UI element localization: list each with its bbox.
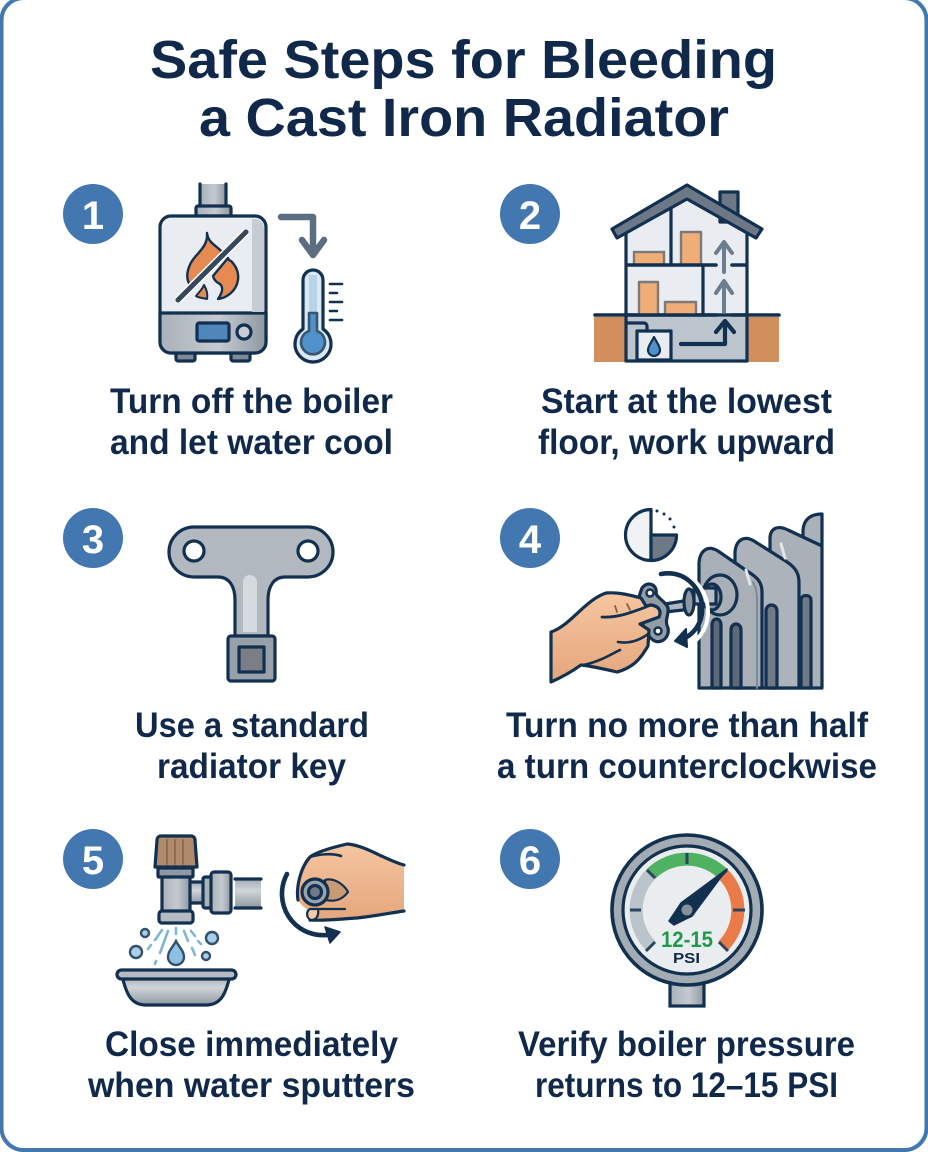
icon: spraying water [130, 928, 218, 965]
badge 6: 6 [519, 839, 541, 883]
icon: house cross-section [594, 185, 779, 362]
caption 3 [135, 706, 369, 786]
icon: key in hand [551, 584, 694, 682]
icon: pressure gauge [612, 835, 762, 1006]
icon: radiator key [169, 527, 333, 681]
badge 4: 4 [519, 518, 542, 562]
badge 3: 3 [82, 518, 104, 562]
icon: cooling arrow [281, 217, 324, 255]
icon: hand closing valve [298, 844, 404, 920]
gauge reading: 12-15 [661, 927, 713, 952]
caption 1: and let water cool [110, 423, 393, 462]
badge 6 [500, 829, 560, 889]
caption 4: a turn counterclockwise [497, 747, 877, 786]
caption 5: when water sputters [87, 1066, 415, 1105]
step 4 panel [497, 508, 877, 786]
title: Safe Steps for Bleeding [150, 30, 777, 90]
caption 6: Verify boiler pressure [518, 1025, 855, 1064]
badge 4 [500, 508, 560, 568]
icon: thermometer [295, 270, 342, 362]
badge 3 [63, 508, 123, 568]
caption 1: Turn off the boiler [110, 382, 393, 421]
step 6 panel [500, 829, 855, 1105]
caption 6 [518, 1025, 855, 1105]
gauge reading: PSI [673, 950, 700, 967]
icon: half-turn dial [626, 510, 676, 560]
title: a Cast Iron Radiator [199, 88, 729, 148]
badge 2: 2 [519, 194, 541, 238]
badge 2 [500, 184, 560, 244]
caption 3: Use a standard [135, 706, 369, 745]
badge 5 [63, 829, 123, 889]
caption 1 [110, 382, 393, 462]
step 2 panel [500, 184, 835, 462]
badge 1 [63, 184, 123, 244]
caption 4: Turn no more than half [506, 706, 868, 745]
icon: closing arrow [282, 874, 340, 943]
caption 6: returns to 12–15 PSI [535, 1066, 838, 1105]
icon: rotation arrow [661, 573, 708, 648]
step 3 panel [63, 508, 369, 786]
caption 4 [497, 706, 877, 786]
caption 3: radiator key [157, 747, 347, 786]
caption 2: floor, work upward [538, 423, 835, 462]
icon: bleed valve [155, 836, 261, 923]
caption 2 [538, 382, 835, 462]
badge 1: 1 [82, 194, 104, 238]
icon: basin [117, 970, 236, 1005]
step 5 panel [63, 829, 415, 1105]
gauge reading [661, 927, 713, 967]
icon: cast iron radiator [694, 514, 822, 688]
caption 5 [87, 1025, 415, 1105]
title [150, 30, 777, 148]
caption 5: Close immediately [105, 1025, 399, 1064]
icon: boiler with flame crossed out [160, 184, 266, 361]
badge 5: 5 [82, 839, 104, 883]
step 1 panel [63, 184, 393, 462]
caption 2: Start at the lowest [541, 382, 832, 421]
